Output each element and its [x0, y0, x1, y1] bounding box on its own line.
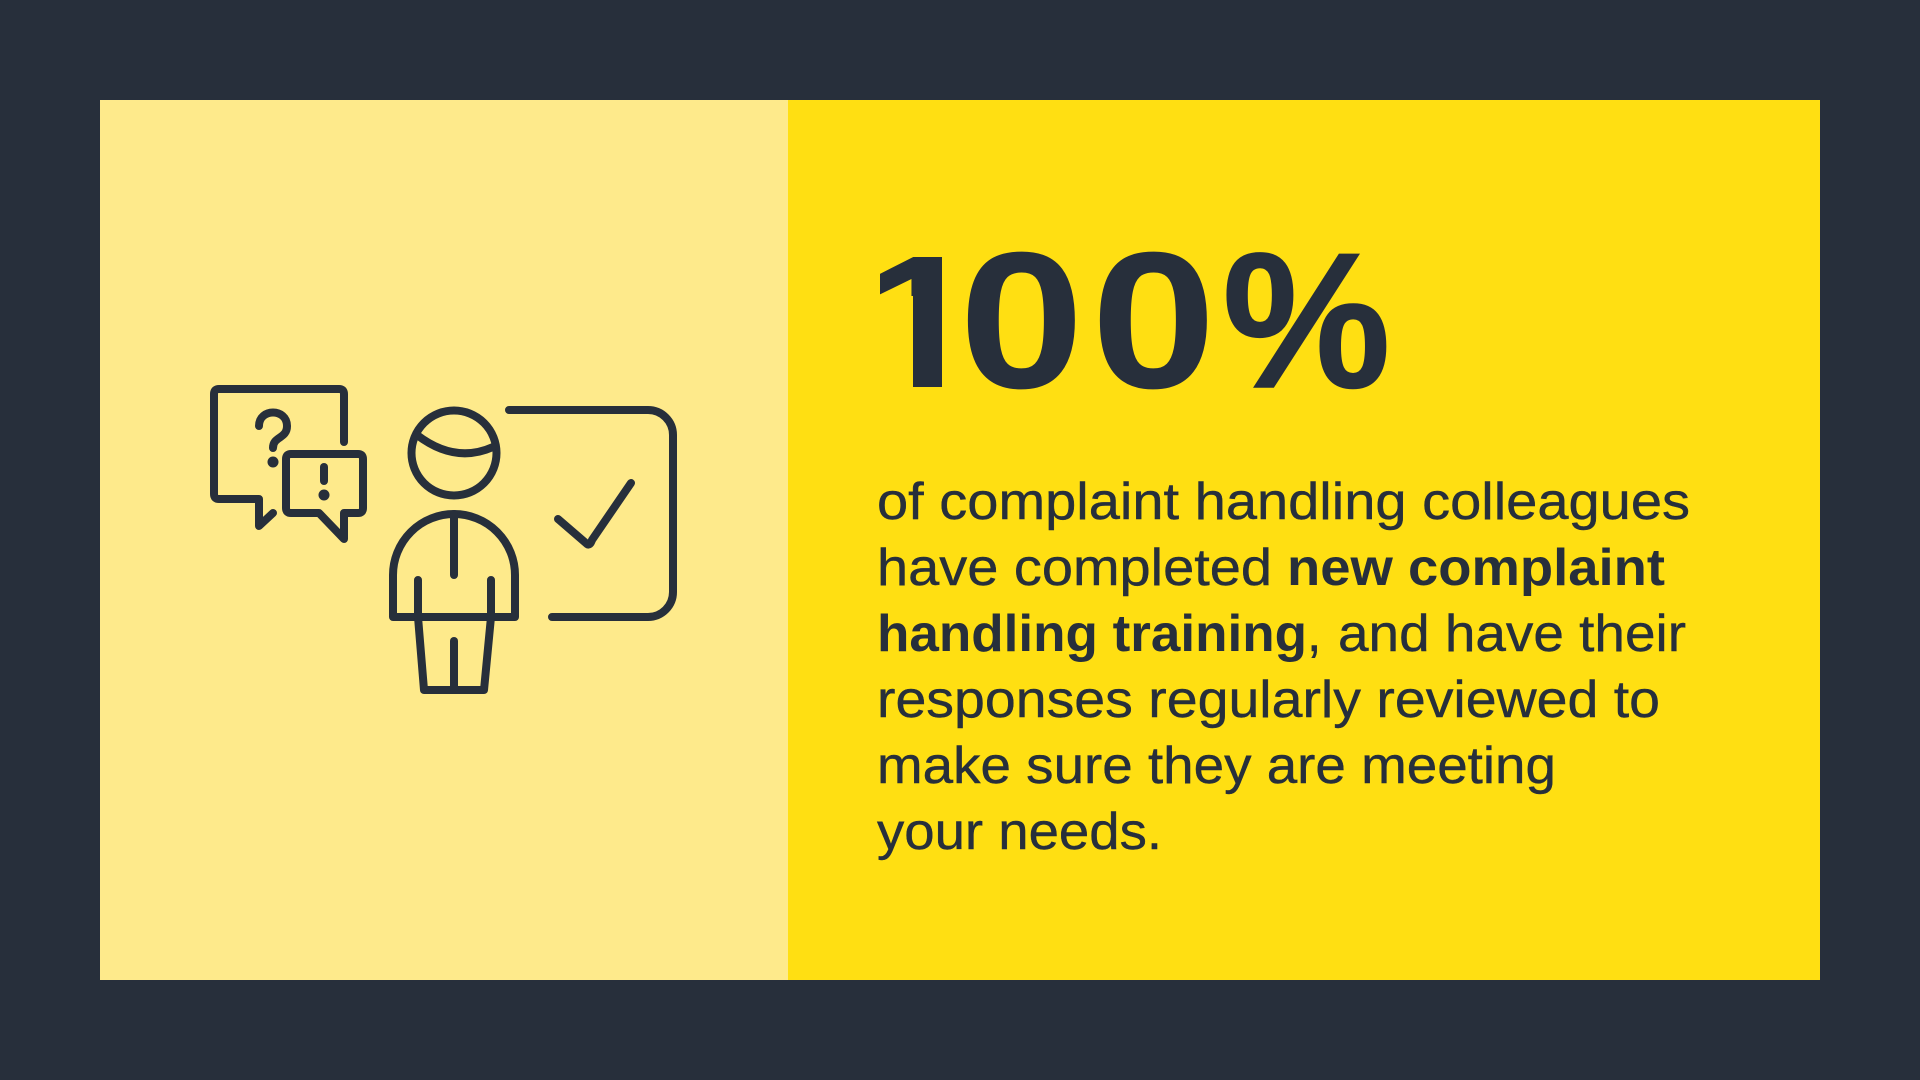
heading: 100% — [880, 252, 1386, 390]
heading: 100%: 0 — [959, 212, 1084, 429]
panel: illustration — [100, 100, 788, 980]
icon: check mark — [558, 483, 631, 544]
text block: description — [877, 473, 1690, 861]
text block: description: , — [1307, 605, 1321, 663]
text block: description: of complaint handling colleagues — [877, 473, 1690, 531]
text block: description: and have their — [1338, 605, 1686, 663]
heading: 100%: % — [1222, 213, 1391, 428]
text block: description: responses regularly reviewed to — [877, 671, 1660, 729]
text block: description: handling training — [877, 605, 1307, 663]
text block: description: have completed — [877, 539, 1272, 597]
icon: person — [393, 410, 515, 690]
text block: description: new complaint — [1287, 539, 1665, 597]
heading: 100%: 0 — [1091, 212, 1216, 429]
icon: presentation board — [509, 410, 673, 617]
text block: description: make sure they are meeting — [877, 737, 1556, 795]
icon: large speech bubble with question mark — [214, 389, 344, 526]
panel: statistic — [788, 100, 1820, 980]
icon: person presenting with speech bubbles and checkmark board — [214, 389, 673, 690]
text block: description: your needs. — [877, 803, 1162, 861]
heading: 100%: 1 — [855, 216, 990, 428]
icon: small speech bubble with exclamation mark — [286, 454, 363, 539]
